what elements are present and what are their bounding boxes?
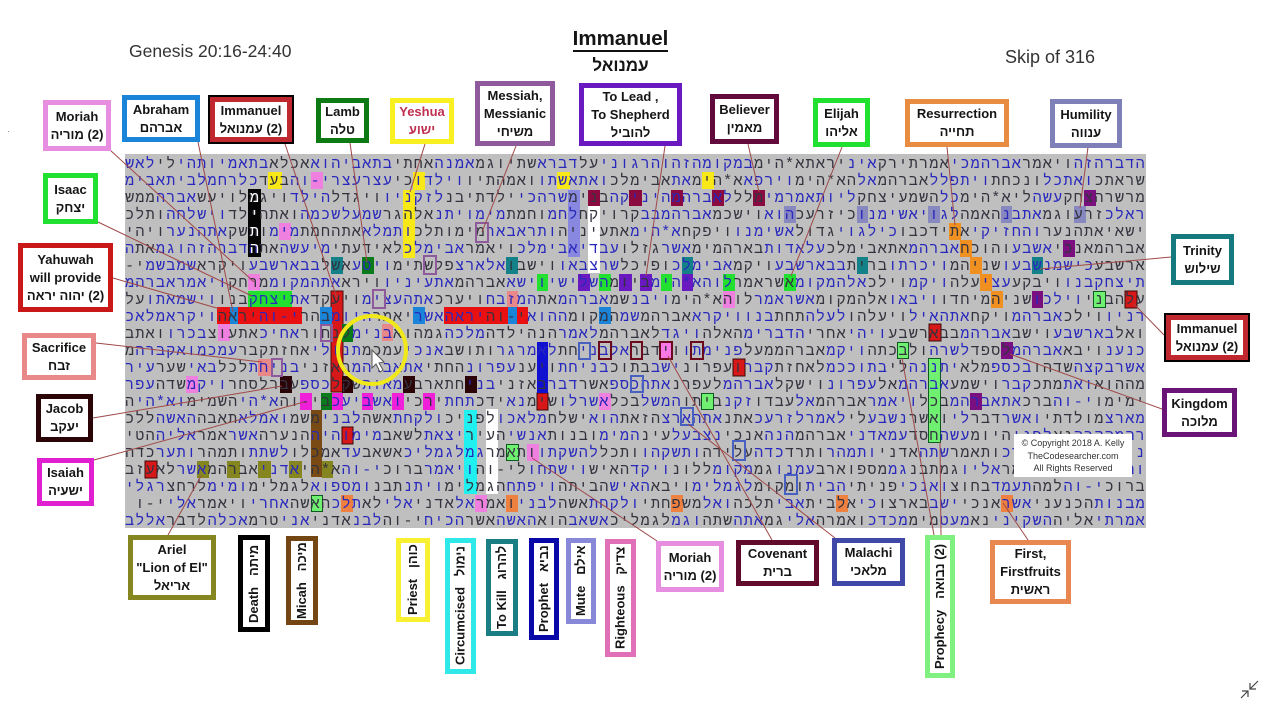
title: Immanuel: Immanuel — [573, 27, 668, 50]
connector: To Lead — [646, 146, 665, 276]
label: To Lead, To Shepherd — [579, 83, 682, 146]
label: Ariel Lion of El: אריאל — [154, 578, 190, 592]
connector: Isaac — [98, 222, 252, 296]
connector: Moriah top — [110, 150, 254, 282]
label: Isaiah: ישעיה — [48, 483, 83, 498]
label: Kingdom: מלוכה — [1181, 414, 1218, 428]
copyright box: All Rights Reserved — [1033, 463, 1113, 473]
copyright box: © Copyright 2018 A. Kelly — [1022, 438, 1124, 448]
label: Prophet — [529, 538, 559, 640]
Hebrew letter grid: רהמהקרהנאלפניהיומעשהחסדעמאדניאברהמהנהאנכינצבעלעינהמימובנותאנשיהעיריצאתלשאבמימוהיההנערהאשראמראליההטי — [125, 428, 1146, 445]
label: Moriah top — [43, 100, 111, 151]
label: Ariel Lion of El — [128, 535, 216, 600]
outlined cells — [272, 223, 797, 494]
label: To Lead, To Shepherd: להוביל — [611, 124, 650, 140]
Hebrew letter grid: ומלנוללינותאמראליוגמתבנגממספוארבעמנוגממקומללונויקדהאישוישתחולי-והויאמרברוכי-והא*היאדניאברהמאשרלאעזב — [125, 462, 1146, 479]
Hebrew letter grid: ראלכזרעוגמאתבנהאמהלגויאשימנוכיזרעכהואוישכמאברהמבבקרויקחלחמוחמתמימויתנאלהגרשמעלשכמהואתהילדוישלחהותלכ — [125, 207, 1146, 224]
label: Resurrection: Resurrection — [917, 106, 997, 121]
Hebrew letter grid: ישאיאתהנערוהחזיקיאתידכבוכילגויגדולאשימנוויפקחא*הימאתעיניהותראבארמימותלכותמלאאתהחמתמימותשקאתהנערויהי — [125, 224, 1146, 241]
label: Messiah, Messianic: Messianic — [484, 106, 546, 120]
label: Isaac — [43, 173, 98, 224]
label: Micah — [286, 536, 318, 625]
connector: Moriah bottom — [532, 458, 657, 541]
Hebrew letter grid: מארצמולדתיואשרדברליואשרנשבעלילאמרלזרעכאתנאתהארצהזאתהואישלחמלאכולפניכולקחתאשהלבנימשמואמלאתאבההאשהללכ — [125, 411, 1146, 428]
Hebrew letter grid: ימימוי-והברכאתאברהמבכלויאמראברהמאלעבדוזקנביתוהמשלבכלאשרלושימנאידכתחתירכיואשביעכבי-והא*היהשמימוא*היהאר — [125, 394, 1146, 411]
label: Righteous — [605, 539, 636, 657]
Hebrew letter grid: תיצחקבנוויבקעעציעלהויקמוילכאלהמקומאשראמרלוהא*הימביומהשלישיוישאאברהמאתעיניוויראאתהמקוממרחקויאמראברהמ — [125, 275, 1146, 292]
label: First, Firstfruits: First, — [1015, 546, 1046, 561]
connector: Humility — [1080, 147, 1088, 208]
connector: Isaiah — [94, 402, 304, 460]
connector: Prophecy two — [940, 442, 941, 535]
connector: Abraham — [198, 142, 233, 312]
label: Yahuwah will provide: Yahuwah — [37, 252, 94, 266]
label: First, Firstfruits: Firstfruits — [1000, 564, 1061, 579]
label: To Lead, To Shepherd: To Lead , — [602, 88, 659, 104]
label: Jacob — [36, 394, 93, 442]
Hebrew letter grid: ברוכי-והלמהתעמדבחוצואנכיפניתיהביתומקומלגמלימויבאהאישהביתהויפתחהגמלימויתנתבנומספואלגמלימומימלרחצרגלי — [125, 479, 1146, 496]
connector: First — [1003, 503, 1028, 540]
label: Sacrifice — [22, 333, 96, 380]
label: Yahuwah will provide — [18, 243, 113, 312]
label: Death — [238, 535, 270, 632]
icon: collapse arrows — [1241, 681, 1258, 698]
label: Yeshua — [390, 98, 454, 144]
label: Yahuwah will provide: יהוה יראה‎ (2) — [27, 288, 104, 302]
icon: mouse cursor — [372, 350, 384, 372]
label: Elijah: Elijah — [824, 106, 859, 120]
connector: Ariel — [168, 476, 201, 535]
label: Lamb: טלה — [330, 122, 355, 136]
label: Moriah top: מוריה‎ (2) — [51, 126, 103, 142]
label: Righteous: Righteous צדיק — [612, 547, 628, 649]
copyright box: TheCodesearcher.com — [1027, 450, 1119, 460]
label: Malachi — [832, 538, 905, 586]
connector: Trinity — [1040, 257, 1171, 269]
label: Isaiah — [37, 458, 94, 506]
label: Resurrection — [905, 99, 1009, 147]
label: Immanuel top: Immanuel — [221, 102, 281, 118]
label: Jacob: Jacob — [46, 401, 83, 416]
label: Immanuel top: עמנואל‎ (2) — [220, 120, 282, 136]
label: Isaac: Isaac — [54, 182, 87, 196]
label: First, Firstfruits — [990, 540, 1071, 604]
connector: Yahuwah will provide — [113, 278, 220, 309]
label: Immanuel right: עמנואל‎ (2) — [1176, 338, 1238, 354]
connector: Jacob — [93, 386, 282, 418]
label: Messiah, Messianic: משיחי — [497, 124, 533, 138]
connector: Resurrection — [947, 147, 955, 225]
label: Prophet: Prophet נביא — [536, 546, 551, 632]
Hebrew letter grid: מההואואתמתכקברוישמעאברהמאלעפרונוישקלאברהמלעפרנאתהכספאשרדברבאזניבניחתארבעמאותשקלכספעברלסחרויקמשדהעפר — [125, 377, 1146, 394]
yellow circle callout — [338, 316, 406, 384]
label: Abraham: Abraham — [133, 102, 189, 116]
connector: Believer — [748, 144, 759, 192]
connector: Elijah — [791, 147, 842, 276]
Hebrew letter grid: אברהמאנכיאשבעוהוכחאברהמאתאבימלכעלאדותבארהמימאשרגזלועבדיאבימלכויאמראבימלכלאידעתימיעשהאתהדברהזהוגמאתה — [125, 241, 1146, 258]
white letters on black column: מ — [250, 190, 259, 207]
label: Messiah, Messianic — [475, 81, 555, 146]
label: Isaiah: Isaiah — [47, 465, 84, 480]
label: Micah: Micah מיכה — [294, 542, 309, 619]
label: Mute: Mute אילם — [573, 546, 588, 616]
label: Believer: מאמין — [727, 120, 762, 135]
label: Ariel Lion of El: "Lion of El" — [136, 560, 208, 574]
connector: Immanuel right — [1134, 304, 1164, 335]
white letters on black column: ה — [250, 241, 259, 258]
label: Elijah — [813, 98, 870, 147]
label: Malachi: Malachi — [845, 545, 892, 560]
label: Trinity — [1171, 234, 1234, 285]
label: Immanuel right: Immanuel — [1177, 320, 1237, 336]
connector: Covenant — [668, 356, 772, 540]
label: Mute — [566, 538, 596, 624]
label: Abraham — [122, 95, 200, 142]
label: Moriah top: Moriah — [56, 108, 98, 124]
connector: Kingdom — [1010, 354, 1162, 409]
copyright box — [1014, 434, 1132, 477]
label: To Kill — [486, 539, 518, 636]
label: Isaac: יצחק — [56, 200, 85, 214]
Hebrew letter grid: מרשרהצחקעשהליא*הימכלהשמעיצחקליותאמרמימלללאברהמהיניקהבנימשרהכיילדתיבנלזקניוויגדלהילדויגמלויעשאברהממש — [125, 190, 1146, 207]
title: Immanuel: עמנואל — [592, 56, 649, 75]
label: Prophecy — [925, 535, 955, 678]
label: Yahuwah will provide: will provide — [30, 270, 101, 284]
label: Humility — [1050, 99, 1122, 148]
label: Covenant — [736, 540, 819, 586]
label: Jacob: יעקב — [50, 419, 79, 434]
connector: Messiah — [482, 146, 516, 232]
label: First, Firstfruits: ראשית — [1011, 582, 1050, 597]
label: Malachi: מלאכי — [850, 563, 887, 578]
label: Trinity: Trinity — [1183, 242, 1222, 258]
Hebrew letter grid: עלהבניוילכושניהמיחדוויבאואלהמקומאשראמרלוהא*הימויבנשמאברהמאתהמזבחויערכאתהעצימויעקדאתיצחקבנווישמאתועל — [125, 292, 1146, 309]
title: Immanuel — [573, 27, 668, 75]
label: Circumcised: Circumcised נימול — [452, 547, 468, 665]
label: Elijah: אליהו — [825, 124, 858, 138]
Hebrew letter grid: רניווילכאברהמויקחאתהאילויעלהולעלהתחתבנוויקראאברהמשמהמקומההואי-והיראהאשריאמרהיומבהרי-והיראהויקראמלאכ — [125, 309, 1146, 326]
white letters on black column: י — [250, 207, 259, 224]
Hebrew letter grid: שראתכואתכלונכחתויתפללאברהמאלהא*הימוירפאא*הימאתאבימלכואתאשתוואמהתיווילדוכיעצרעצרי-והבעדכלרחמלביתאבימ — [125, 173, 1146, 190]
label: Believer — [710, 94, 779, 144]
label: Covenant: Covenant — [748, 546, 807, 561]
Hebrew letter grid: הדברהזהויאמראברהמכיאמרתירקאיניראתא*הימבמקומהזהוהרגוניעלדבראשתיוגמאמנהאחתיבתאביהואאכלאבתאמיותהילילאש — [125, 156, 1146, 173]
label: Prophecy: Prophecy נבואה‎ (2) — [932, 544, 947, 669]
label: Humility: ענווה — [1071, 124, 1101, 140]
connector: Sacrifice — [96, 343, 262, 362]
label: Kingdom: Kingdom — [1171, 396, 1228, 410]
label: Yeshua: Yeshua — [399, 104, 445, 119]
label: Ariel Lion of El: Ariel — [158, 542, 186, 556]
connector: Prophecy one — [902, 358, 934, 535]
label: Abraham: אברהם — [140, 120, 182, 134]
Hebrew letter grid: כנענויבאאברהמלספדלשרהולבכתהויקמאברהממעלפנימתווידבראלבניחתלאמרגרותושבאנכיעמכמתנוליאחזתקברעמכמואקברהמ — [125, 343, 1146, 360]
label: Moriah bottom: מוריה‎ (2) — [664, 568, 716, 582]
label: Resurrection: תחייה — [940, 124, 974, 139]
Hebrew letter grid — [125, 156, 1146, 529]
label: Lamb — [316, 98, 369, 143]
label: Humility: Humility — [1060, 106, 1112, 122]
top-right note: Skip of 316: Skip of 316 — [1005, 47, 1095, 67]
letter grid background — [125, 154, 1146, 528]
connector: Yeshua — [410, 144, 425, 192]
stray dot — [8, 131, 9, 132]
Hebrew letter grid: אשרבקצהשדהובכספמלאיתננהליבתוככמלאחזתקברועפרונישבבתוכבניחתויענעפרונהחתיאתאברהמבאזניבניחתלכלבאישערעיר — [125, 360, 1146, 377]
white letters on black column — [250, 190, 259, 258]
Hebrew letter grid: ארשבעכישמנשבעושניהמויכרתובריתבבארשבעויקמאבימלכופיכלשרצבאווישבואלארצפלשתימויטעאשלבבארשבעויקראשמבשמי- — [125, 258, 1146, 275]
label: Priest — [396, 538, 430, 622]
connector: Lamb — [350, 143, 367, 262]
label: Circumcised — [445, 538, 476, 674]
label: Messiah, Messianic: Messiah, — [488, 88, 542, 102]
label: Kingdom — [1162, 388, 1237, 437]
top-left reference: Genesis 20:16-24:40: Genesis 20:16-24:40 — [129, 41, 291, 61]
label: Trinity: שילוש — [1184, 260, 1221, 276]
Hebrew letter grid: מבנותהכנעניאשראנכיישבבארצוכיאלביתאביתלכהואלמשפחתיולקחתאשהלבניואמראלאדניאלילאתלכהאשהאחריויאמראליי-ו — [135, 496, 1146, 513]
label: Believer: Believer — [719, 102, 770, 117]
label: Moriah bottom — [656, 541, 724, 592]
label: To Kill: To Kill להרוג — [494, 546, 509, 629]
connector: Immanuel top — [285, 144, 337, 298]
label: Covenant: ברית — [763, 564, 792, 579]
Hebrew letter grid: נינאמעטמיממכדכותאמרשתהאדניותמהרותרדכדהעלידהותשקהוותכללהשקתוותאמרגמלגמליכאשאבעדאמכלולשתתותמהרותערכדה — [125, 445, 1146, 462]
label: Immanuel top — [210, 97, 292, 142]
label: Immanuel right — [1166, 315, 1248, 360]
label: Moriah bottom: Moriah — [669, 550, 711, 564]
label: Priest: Priest כוהן — [405, 545, 420, 615]
label: Yeshua: ישוע — [409, 122, 435, 137]
label: To Lead, To Shepherd: To Shepherd — [591, 106, 670, 122]
connector: Malachi — [688, 424, 835, 538]
label: Sacrifice: זבח — [48, 358, 70, 372]
Hebrew letter grid: ואלבארשבעוישבאברהמבבארשבעויהיאחריהדברימהאלהויגדלאברהמלאמרהנהילדהמלכהגמהואבנימלנחוראחיכאתעוצבכרוואתב — [125, 326, 1146, 343]
label: Sacrifice: Sacrifice — [32, 340, 86, 354]
label: Lamb: Lamb — [325, 104, 360, 118]
label: Death: Death מיתה — [246, 544, 261, 623]
white letters on black column: ת — [250, 224, 259, 241]
